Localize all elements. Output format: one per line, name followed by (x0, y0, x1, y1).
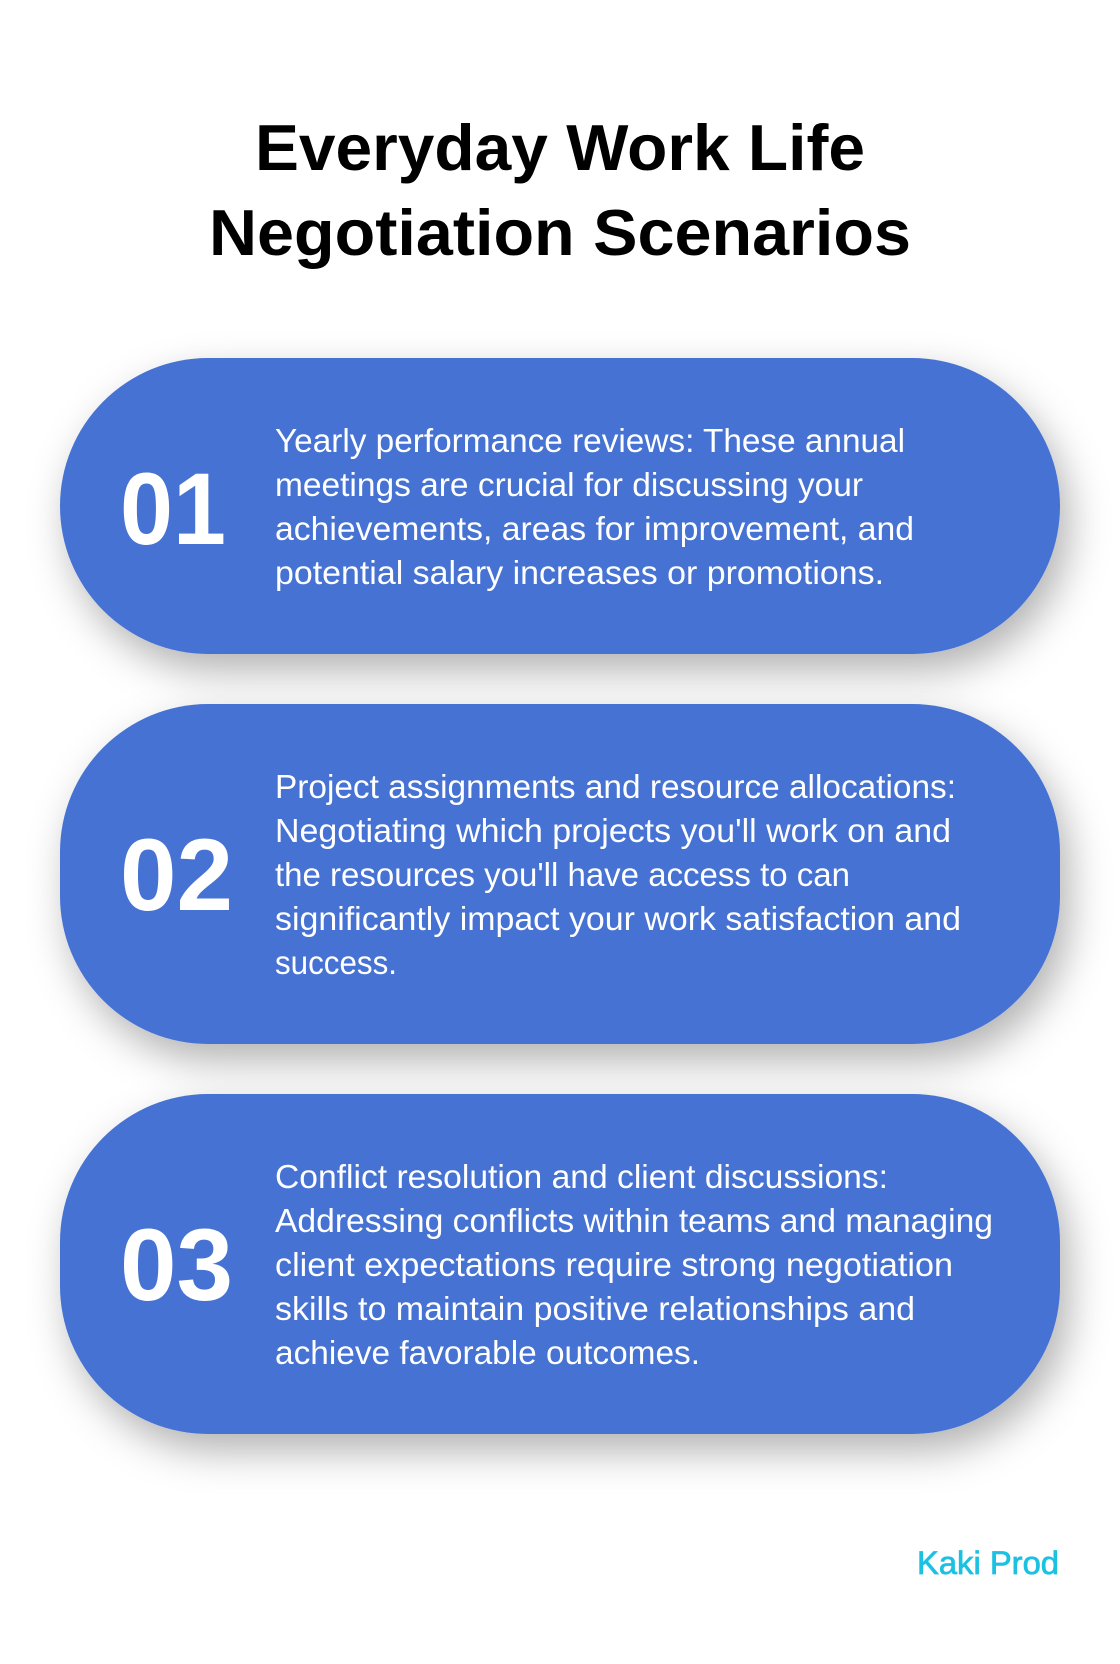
pill background 02 (60, 704, 1060, 1044)
number 03: 03 (120, 1208, 233, 1322)
number 02: 02 (120, 818, 233, 932)
pill background 03 (60, 1094, 1060, 1434)
text: yearly performance reviews: Yearly performance reviews: These annual (275, 422, 905, 459)
number 01: 01 (120, 452, 226, 566)
text: project assignments: Negotiating which projects you'll work on and (275, 812, 951, 849)
text: conflict resolution: client expectations require strong negotiation (275, 1246, 953, 1283)
text: yearly performance reviews: potential salary increases or promotions. (275, 554, 884, 591)
text: yearly performance reviews: meetings are crucial for discussing your (275, 466, 863, 503)
text: project assignments: success. (275, 944, 397, 981)
title: Everyday Work Life (255, 111, 865, 184)
title (209, 111, 911, 269)
text: yearly performance reviews: achievements, areas for improvement, and (275, 510, 914, 547)
panel: step 03 (60, 1094, 1060, 1434)
panel: step 02 (60, 704, 1060, 1044)
text: conflict resolution: achieve favorable outcomes. (275, 1334, 700, 1371)
panel: step 01 (60, 358, 1060, 654)
text: project assignments: the resources you'll have access to can (275, 856, 850, 893)
text: yearly performance reviews (275, 422, 914, 591)
title: Negotiation Scenarios (209, 196, 911, 269)
pill background 01 (60, 358, 1060, 654)
text: conflict resolution: Addressing conflicts within teams and managing (275, 1202, 993, 1239)
text: conflict resolution: skills to maintain positive relationships and (275, 1290, 915, 1327)
text: project assignments: Project assignments and resource allocations: (275, 768, 956, 805)
text: project assignments (275, 768, 961, 981)
text: project assignments: significantly impact your work satisfaction and (275, 900, 961, 937)
text: conflict resolution: Conflict resolution and client discussions: (275, 1158, 888, 1195)
text: conflict resolution (275, 1158, 993, 1371)
brand logo: Kaki Prod: Kaki Prod (917, 1545, 1059, 1581)
